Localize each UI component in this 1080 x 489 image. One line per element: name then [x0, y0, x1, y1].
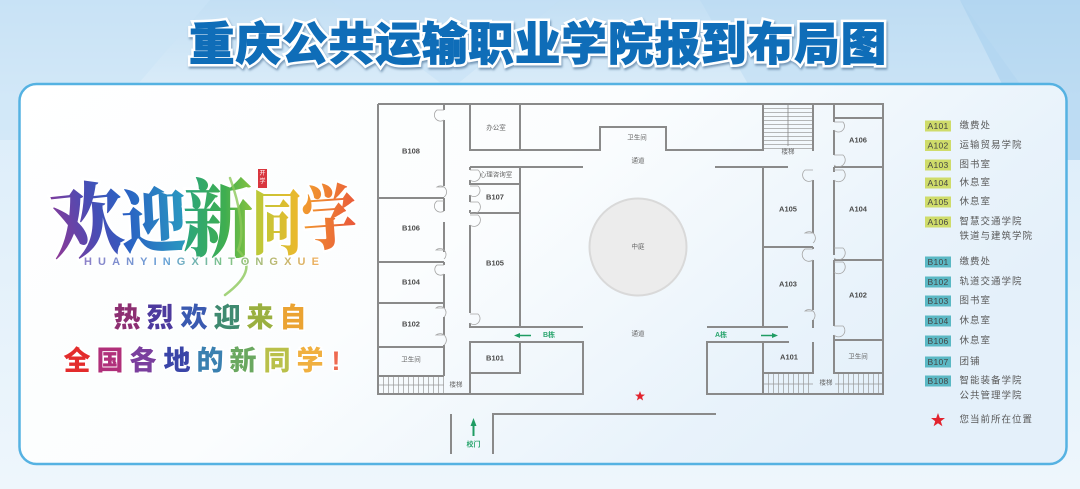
legend: B rooms: 图书室: [960, 294, 991, 306]
legend: B rooms: B107: [927, 357, 949, 367]
room labels: B107: [486, 192, 504, 202]
arrow: school gate: [466, 418, 480, 448]
welcome line 1: 热: [114, 303, 140, 333]
room labels: B108: [402, 146, 420, 156]
legend: A rooms: A102: [927, 140, 949, 150]
welcome line 2: 国: [96, 346, 124, 376]
legend: current position: [931, 413, 1033, 426]
room labels: B104: [402, 278, 421, 286]
red seal: 开: [259, 170, 266, 177]
doors: [434, 110, 845, 345]
legend: B rooms: 智能装备学院: [960, 374, 1023, 386]
legend: A rooms: [925, 120, 1033, 242]
legend: A rooms: A105: [927, 197, 949, 207]
room labels: 楼梯: [782, 146, 795, 156]
legend: B rooms: B103: [927, 296, 949, 306]
legend: B rooms: [925, 256, 1023, 402]
welcome calligraphy heading: 同: [252, 169, 302, 269]
legend: B rooms: 团铺: [960, 356, 981, 368]
room labels: 通道: [632, 328, 645, 338]
welcome line 2: 各: [130, 345, 156, 376]
room labels: B101: [486, 354, 504, 362]
legend: B rooms: B106: [927, 336, 949, 346]
room labels: 办公室: [486, 122, 506, 132]
legend: A rooms: 缴费处: [960, 120, 991, 132]
welcome line 2: 地: [164, 346, 190, 376]
welcome line 1: 自: [280, 303, 306, 333]
legend: A rooms: A104: [927, 178, 949, 188]
welcome line 1: [114, 303, 306, 333]
legend: B rooms: B102: [927, 277, 949, 287]
red seal: [258, 169, 267, 188]
legend: [925, 120, 1033, 426]
welcome line 2: 学: [296, 345, 324, 376]
room labels: 中庭: [632, 242, 645, 250]
welcome line 1: 来: [246, 303, 274, 333]
welcome line 2: 同: [264, 346, 290, 376]
room labels: A103: [779, 280, 797, 288]
legend: current position: 您当前所在位置: [960, 414, 1033, 426]
legend: A rooms: A106: [927, 217, 949, 227]
room labels: A102: [849, 290, 867, 300]
room labels: 楼梯: [450, 380, 463, 388]
stairs: [378, 104, 883, 394]
legend: A rooms: 休息室: [960, 176, 991, 188]
welcome line 2: !: [332, 346, 340, 376]
welcome line 2: 全: [64, 345, 90, 376]
legend: B rooms: B108: [927, 376, 949, 386]
legend: A rooms: 智慧交通学院: [960, 216, 1023, 228]
room labels: 通道: [632, 156, 645, 164]
room labels: A105: [779, 204, 797, 214]
legend: B rooms: 缴费处: [960, 256, 991, 268]
legend: A rooms: 运输贸易学院: [960, 139, 1023, 151]
welcome calligraphy heading: [43, 153, 360, 295]
welcome line 1: 烈: [146, 303, 174, 333]
welcome line 2: [64, 345, 340, 376]
arrow: A building: A栋: [715, 330, 727, 339]
room labels: 楼梯: [820, 378, 833, 386]
arrow: B building: [514, 330, 555, 339]
room labels: B106: [402, 224, 420, 232]
legend: A rooms: 铁道与建筑学院: [960, 230, 1033, 242]
legend: B rooms: B101: [927, 257, 949, 267]
icon: current position star: [635, 391, 645, 400]
legend: B rooms: B104: [927, 316, 949, 326]
legend: A rooms: A103: [927, 160, 949, 170]
welcome calligraphy heading: 欢: [43, 154, 129, 278]
welcome line 1: 迎: [214, 303, 240, 333]
welcome line 1: 欢: [180, 303, 208, 333]
floor plan: [378, 104, 883, 454]
room labels: [401, 122, 868, 388]
room labels: A101: [780, 352, 798, 362]
walls: [378, 104, 883, 454]
room labels: A104: [849, 204, 868, 214]
legend: A rooms: 图书室: [960, 158, 991, 170]
arrow: B building: B栋: [543, 330, 555, 339]
room labels: B102: [402, 320, 420, 328]
welcome line 2: 新: [230, 346, 256, 376]
arrow: school gate: 校门: [466, 440, 480, 448]
atrium circle: [590, 198, 686, 296]
welcome calligraphy heading: 学: [298, 161, 360, 265]
room labels: 卫生间: [627, 132, 647, 142]
title: 重庆公共运输职业学院报到布局图: [189, 19, 887, 70]
arrow: A building: [715, 330, 778, 339]
legend: B rooms: 休息室: [960, 314, 991, 326]
legend: B rooms: 休息室: [960, 334, 991, 346]
room labels: A106: [849, 136, 867, 144]
room labels: B105: [486, 258, 504, 268]
pinyin line: HUANYINGXINTONGXUE: [84, 256, 325, 268]
panel: welcome artwork: [43, 153, 360, 376]
legend: A rooms: A101: [927, 121, 949, 131]
room labels: 卫生间: [401, 354, 421, 364]
room labels: 卫生间: [848, 352, 868, 360]
welcome calligraphy heading: 新: [183, 153, 253, 275]
room labels: 心理咨询室: [480, 170, 513, 178]
panel: main board: [20, 84, 1066, 464]
welcome calligraphy heading: 迎: [118, 163, 190, 268]
legend: B rooms: 公共管理学院: [960, 390, 1023, 402]
red seal: 学: [259, 177, 266, 185]
legend: B rooms: 轨道交通学院: [960, 276, 1023, 288]
legend: A rooms: 休息室: [960, 196, 991, 208]
title: 重庆公共运输职业学院报到布局图: [189, 19, 887, 70]
welcome line 2: 的: [196, 346, 224, 376]
